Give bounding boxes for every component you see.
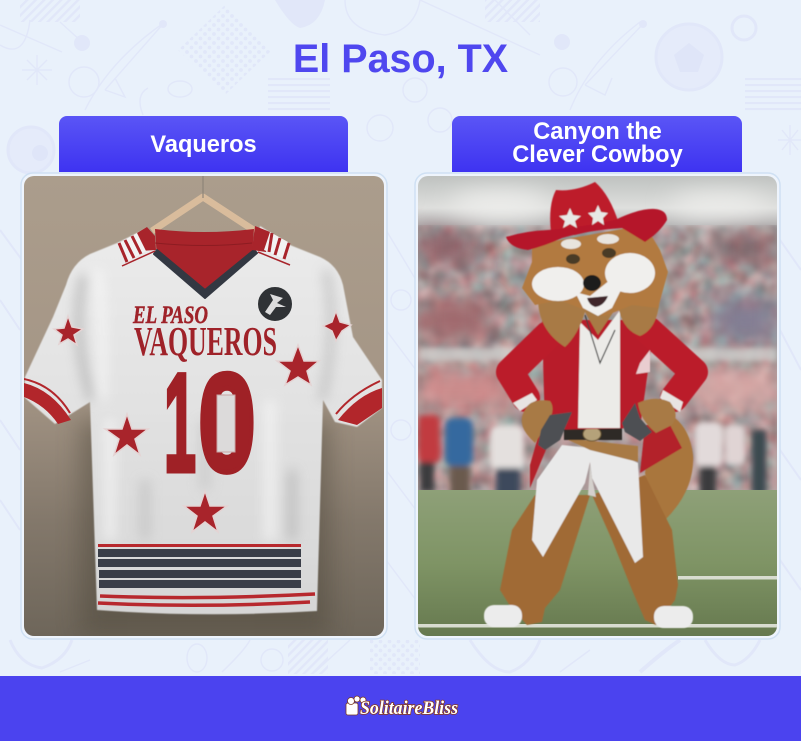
right name tab	[452, 116, 742, 172]
mascot legs	[500, 475, 678, 625]
neck trim	[154, 250, 257, 298]
jacket tails	[530, 425, 682, 488]
eyebrows	[561, 234, 619, 249]
mouth	[587, 296, 608, 307]
gloves	[538, 403, 652, 450]
neck fur	[538, 300, 660, 348]
wrist fur	[522, 399, 676, 443]
logo wordmark: SolitaireBliss	[360, 698, 458, 719]
jersey body and sleeves	[24, 226, 382, 614]
white cheeks	[532, 253, 655, 316]
panel: jersey photo	[21, 173, 387, 639]
mascot head	[522, 225, 668, 316]
jacket emblem	[636, 350, 650, 374]
left name tab	[59, 116, 348, 172]
mascot figure	[484, 182, 694, 628]
right shoulder stripes	[252, 226, 290, 265]
jersey inner collar	[155, 229, 254, 295]
right sleeve cuff	[338, 388, 382, 425]
mascot shoes	[484, 605, 693, 628]
jersey text: Vaqueros: VAQUEROS	[134, 318, 277, 364]
left shoulder stripes	[118, 227, 156, 266]
mascot tail	[645, 418, 693, 520]
title: El Paso, TX	[293, 37, 508, 81]
field lines	[418, 576, 777, 628]
jersey number	[166, 370, 254, 475]
stadium background	[418, 176, 777, 502]
footer bar	[0, 676, 801, 741]
jersey hem stripes	[98, 544, 315, 605]
jersey number: 0	[198, 344, 256, 501]
white shirt	[578, 310, 620, 428]
cowboy hat	[506, 182, 667, 250]
jersey text: El Paso: EL PASO	[132, 302, 208, 329]
footer logo	[346, 696, 458, 719]
left sleeve cuff	[24, 383, 71, 424]
blurred players	[418, 415, 766, 502]
lanyard	[585, 315, 615, 363]
left tab label: Vaqueros	[150, 132, 257, 158]
logo card icon	[346, 696, 366, 715]
football field	[418, 490, 777, 636]
belly fur band	[564, 438, 638, 462]
nose	[583, 275, 601, 291]
blurred crowd texture	[418, 225, 777, 490]
sleeve cuffs	[513, 390, 683, 412]
crest badge	[258, 286, 292, 322]
jersey number: 1	[164, 344, 196, 501]
panel: mascot photo	[415, 173, 780, 639]
hat stars	[559, 205, 608, 228]
white trousers	[532, 445, 643, 563]
jacket torso and arms	[510, 320, 694, 430]
right tab label: Clever Cowboy	[512, 142, 683, 168]
belt and buckle	[564, 427, 622, 441]
right tab label: Canyon the	[533, 119, 662, 145]
jersey stars	[54, 311, 351, 532]
coat hanger	[152, 176, 255, 231]
eyes	[566, 248, 616, 264]
